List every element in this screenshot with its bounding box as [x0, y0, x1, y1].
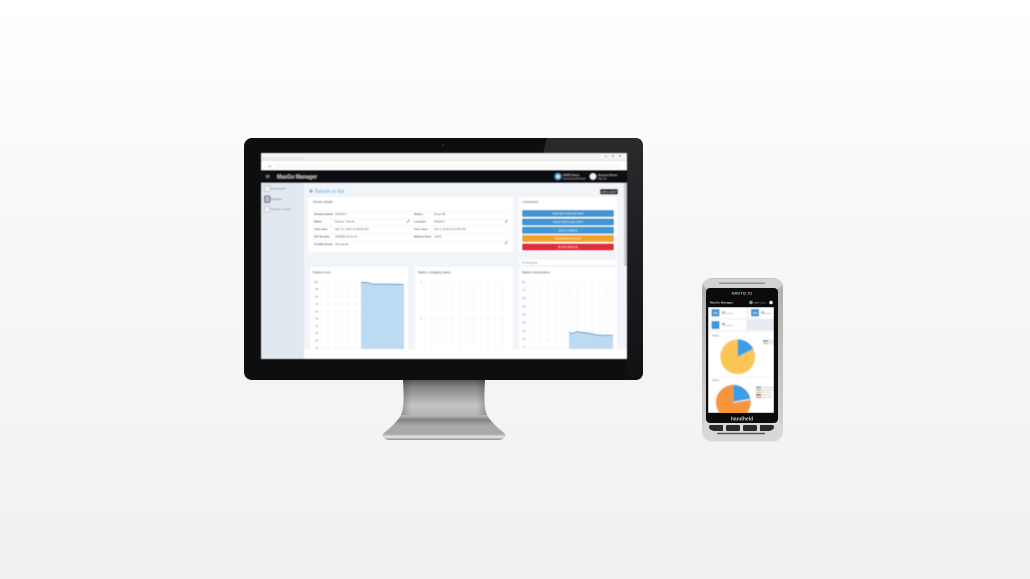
- action button: APPLY/EDIT: [601, 190, 617, 194]
- chart: battery temperature: [519, 267, 617, 349]
- chart: battery temperature: 40: [522, 314, 526, 316]
- panel: device details: Apr 3, 2019 11:13:49 AM: [434, 227, 466, 231]
- panel: device details: Status: [414, 212, 423, 216]
- pie chart: bottom: Battery: [712, 379, 720, 382]
- monitor stand: [383, 380, 505, 440]
- chart: battery level: 20: [315, 340, 319, 342]
- chart: battery level: 60: [315, 310, 319, 314]
- chart: battery level: Battery level: [313, 270, 331, 274]
- phone app header: MaxGo Manager: [710, 300, 734, 304]
- panel: device details: 35454X7: [335, 212, 347, 216]
- panel: device details: 7N0000.10.04.16: [335, 234, 358, 238]
- chart: battery level: 30: [315, 332, 319, 335]
- screen: [261, 153, 627, 359]
- chart: battery temperature: 0: [524, 346, 526, 349]
- panel: device details: Config Group: [314, 242, 333, 246]
- button: orange command: SEND DEVICE LOCK: [555, 237, 581, 241]
- chart: battery charging status: Battery charging status: [418, 270, 451, 274]
- handheld logo: handheld: [731, 416, 753, 422]
- app header bar: [261, 170, 627, 183]
- panel: device details: Device, Test #1: [335, 220, 355, 224]
- browser chrome: ← ⟳: [263, 164, 272, 169]
- chart: battery temperature: 10: [522, 338, 526, 341]
- chart: battery temperature: 80: [522, 281, 526, 284]
- chart: battery level: 40: [315, 325, 319, 328]
- chart: battery temperature: 50: [522, 306, 526, 308]
- chart: battery level: 100: [314, 281, 319, 284]
- brand label: NAUTIZ X2: [732, 290, 753, 296]
- app header bar: MAPC Demo: [563, 173, 580, 177]
- panel: device details: Revol 50: [434, 212, 446, 216]
- panel: device details: [308, 197, 513, 252]
- panel: device details: OS Version: [314, 234, 330, 238]
- phone screen: [708, 307, 774, 420]
- chart: battery level: 70: [315, 303, 319, 306]
- main content background: [304, 183, 627, 349]
- chart: battery charging status: 0: [421, 318, 423, 320]
- bottom browser strip: [261, 349, 627, 359]
- phone app header: [710, 300, 773, 304]
- panel: device details: Serial number: [314, 212, 334, 216]
- panel: device details: Location: [414, 220, 426, 224]
- camera: [442, 144, 444, 146]
- button: block device: BLOCK DEVICE: [558, 245, 578, 249]
- monitor: [244, 138, 643, 380]
- chart: battery temperature: Battery temperature: [522, 270, 550, 274]
- return to list link: Return to list: [315, 189, 345, 195]
- app header bar: MaxGo Manager: [277, 174, 317, 180]
- panel: device details: Name: [314, 220, 322, 224]
- panel: device details: First seen: [414, 227, 428, 231]
- chart: battery temperature: 30: [522, 322, 526, 324]
- monitor bezel: [244, 138, 643, 380]
- button: request device info: REQUEST DEVICE INFO: [553, 212, 583, 216]
- page scrollbar: [624, 183, 627, 266]
- panel: device details: Device details: [313, 200, 333, 204]
- tags strip: Tl Lab genie: [522, 260, 538, 264]
- chart: battery level: 10: [315, 347, 319, 350]
- stat tiles: 355: [713, 311, 718, 315]
- chart: battery level: 50: [315, 318, 319, 320]
- sidebar: Dashboard: [271, 186, 286, 190]
- phone keypad: [709, 425, 774, 434]
- stat tiles: 256: [753, 311, 758, 315]
- panel: device details: Apr 12, 2019 10:38:09 AM: [335, 227, 369, 231]
- chart: battery temperature: 70: [522, 289, 526, 292]
- phone face: [706, 288, 778, 423]
- button: send installed apps: SEND INSTALLED APPS: [553, 220, 583, 224]
- browser chrome: [261, 153, 627, 170]
- chart: battery charging status: 1: [421, 281, 423, 284]
- sidebar: [261, 183, 304, 359]
- panel: device details: Battery level: [414, 234, 431, 238]
- action button: [600, 189, 618, 194]
- app header bar: Account Owner: [598, 173, 617, 177]
- panel: device details: 100%: [434, 234, 442, 238]
- chart: battery charging status: [415, 267, 513, 349]
- phone app header: MAPC Demo: [754, 302, 767, 304]
- app header bar: Sign out: [598, 178, 607, 180]
- panel: commands: [519, 197, 617, 252]
- chart: battery temperature: 20: [522, 330, 526, 333]
- tags strip: [519, 260, 617, 265]
- panel: device details: Last seen: [314, 227, 328, 231]
- chart: battery level: 80: [315, 296, 319, 298]
- panel: device details: Test group: [335, 242, 349, 246]
- button: send screen: SEND SCREEN: [558, 228, 578, 232]
- pie chart: top: Status: [712, 334, 720, 338]
- panel: device details: Mid2017: [434, 220, 445, 224]
- panel: commands: Commands: [522, 200, 539, 204]
- sidebar: Devices: [271, 197, 282, 201]
- phone body: [702, 278, 783, 442]
- app header bar: Handheld 186 Revolt: [563, 178, 586, 180]
- chart: battery level: [310, 267, 408, 350]
- chart: battery level: 90: [315, 288, 319, 291]
- handheld phone: [702, 278, 783, 442]
- bezel reflection: [543, 138, 643, 380]
- chart: battery temperature: 60: [522, 297, 526, 300]
- stat tiles: [710, 308, 774, 330]
- sidebar: Device Groups: [271, 207, 291, 211]
